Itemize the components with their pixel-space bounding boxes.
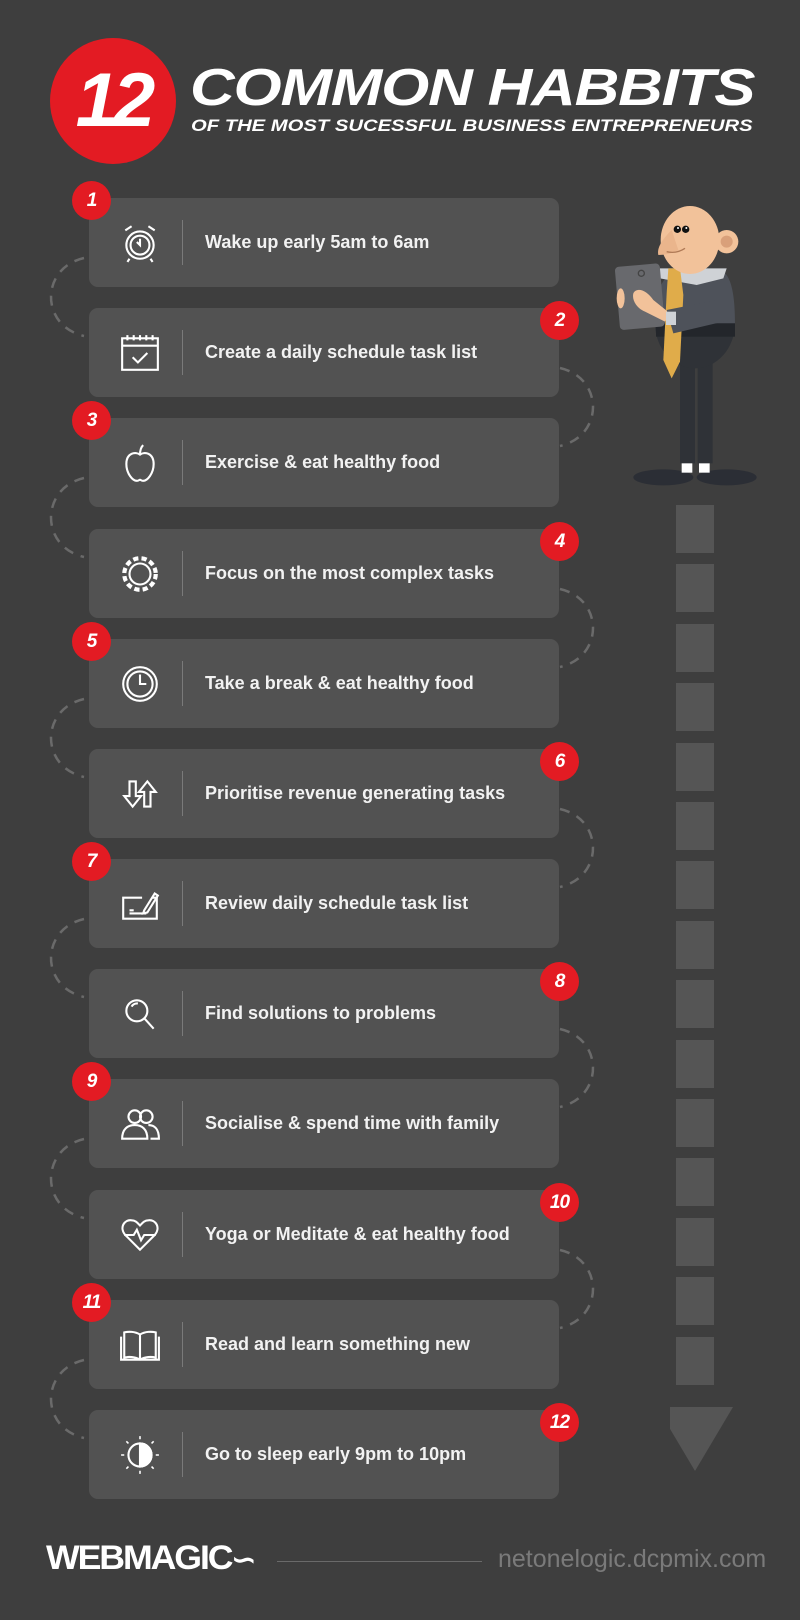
character: businessman with tablet xyxy=(615,206,756,486)
badge 10 xyxy=(540,1183,579,1222)
card 4 xyxy=(89,529,559,618)
badge 3 xyxy=(72,401,111,440)
badge 10: 10 xyxy=(550,1192,569,1213)
card 10: Yoga or Meditate & eat healthy food xyxy=(205,1224,510,1244)
card 11 xyxy=(89,1300,559,1389)
card 2 xyxy=(89,308,559,397)
card 6 xyxy=(89,749,559,838)
card 5: Take a break & eat healthy food xyxy=(205,673,474,693)
card 9 xyxy=(89,1079,559,1168)
card 7: Review daily schedule task list xyxy=(205,893,468,913)
header badge: 12 xyxy=(50,38,176,164)
card 12: Go to sleep early 9pm to 10pm xyxy=(205,1444,466,1464)
card 12 xyxy=(89,1410,559,1499)
card 2: Create a daily schedule task list xyxy=(205,342,477,362)
header badge: 12: 12 xyxy=(76,58,150,143)
card 7 xyxy=(89,859,559,948)
badge 9: 9 xyxy=(87,1071,96,1092)
timeline arrow: dashed column with triangle xyxy=(670,505,733,1470)
card 3 xyxy=(89,418,559,507)
badge 5 xyxy=(72,622,111,661)
card 6: Prioritise revenue generating tasks xyxy=(205,783,505,803)
badge 7 xyxy=(72,842,111,881)
badge 6: 6 xyxy=(555,751,564,772)
card 8 xyxy=(89,969,559,1058)
badge 1: 1 xyxy=(87,190,96,211)
card 1: Wake up early 5am to 6am xyxy=(205,232,429,252)
badge 7: 7 xyxy=(87,851,96,872)
badge 4: 4 xyxy=(555,531,564,552)
badge 9 xyxy=(72,1062,111,1101)
subtitle: OF THE MOST SUCESSFUL BUSINESS ENTREPRENEURS xyxy=(191,116,753,135)
footer logo: WEBMAGIC∽ xyxy=(46,1539,256,1577)
card 8: Find solutions to problems xyxy=(205,1003,436,1023)
badge 2 xyxy=(540,301,579,340)
badge 12: 12 xyxy=(550,1412,569,1433)
badge 2: 2 xyxy=(555,310,564,331)
card 1 xyxy=(89,198,559,287)
card 11: Read and learn something new xyxy=(205,1334,470,1354)
badge 3: 3 xyxy=(87,410,96,431)
badge 8: 8 xyxy=(555,971,564,992)
footer url: netonelogic.dcpmix.com xyxy=(498,1545,766,1573)
badge 11: 11 xyxy=(83,1292,100,1313)
card 3: Exercise & eat healthy food xyxy=(205,452,440,472)
badge 8 xyxy=(540,962,579,1001)
title: COMMON HABBITS xyxy=(190,59,754,117)
badge 11 xyxy=(72,1283,111,1322)
badge 4 xyxy=(540,522,579,561)
badge 12 xyxy=(540,1403,579,1442)
badge 5: 5 xyxy=(87,631,96,652)
badge 6 xyxy=(540,742,579,781)
card 10 xyxy=(89,1190,559,1279)
card 9: Socialise & spend time with family xyxy=(205,1113,499,1133)
card 4: Focus on the most complex tasks xyxy=(205,563,494,583)
card 5 xyxy=(89,639,559,728)
badge 1 xyxy=(72,181,111,220)
